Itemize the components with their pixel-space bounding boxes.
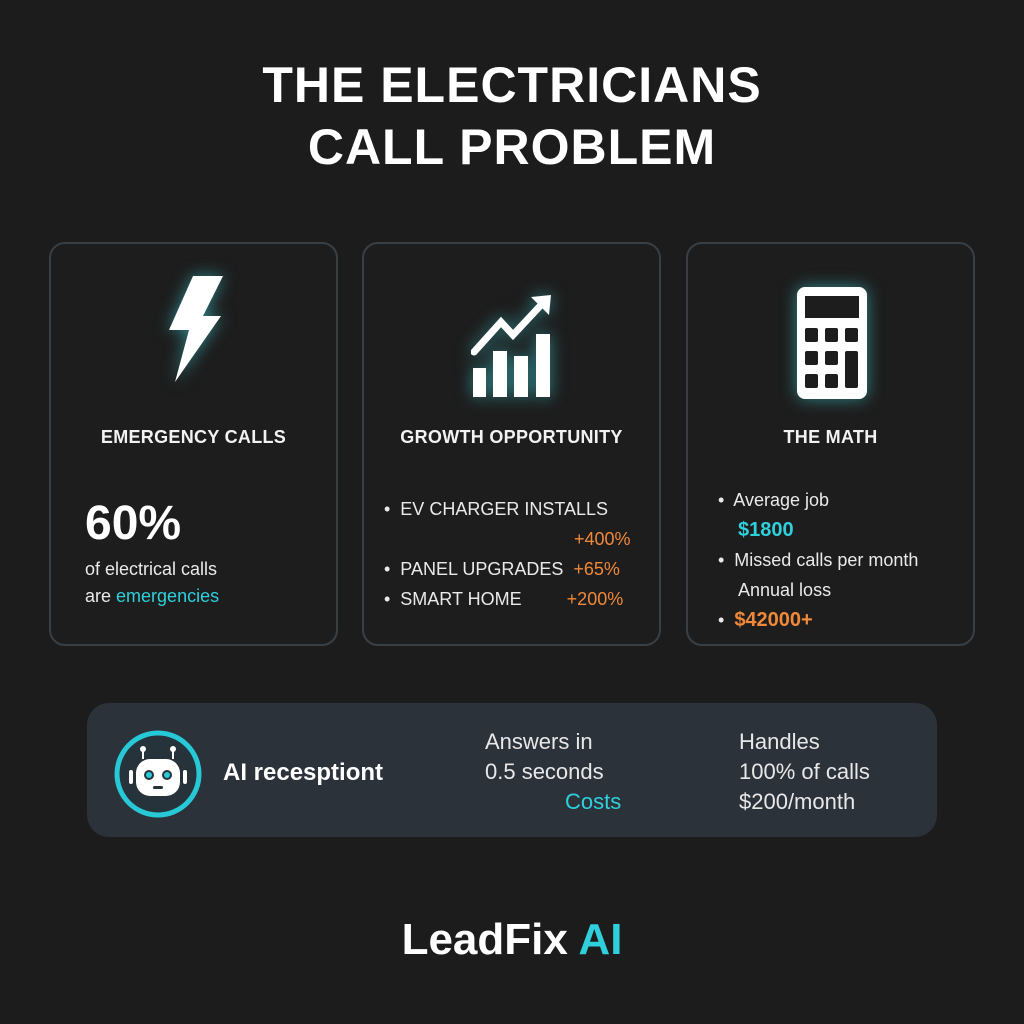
panel: growth opportunity: [362, 242, 661, 646]
list: • $42000+: [718, 609, 813, 631]
list: • SMART HOME +200%: [384, 589, 623, 609]
icon: calculator: [786, 276, 878, 410]
panel: AI receptionist bar: [87, 703, 937, 837]
title: [262, 57, 762, 175]
stat: answers: 0.5 seconds: [485, 759, 604, 784]
stat: handles: 100% of calls: [739, 759, 870, 784]
list: [384, 499, 631, 609]
description: [85, 559, 219, 606]
list: Annual loss: [738, 580, 831, 600]
stat: handles: [739, 729, 870, 814]
icon: lightning: [163, 266, 228, 382]
list: • EV CHARGER INSTALLS: [384, 499, 608, 519]
title: THE ELECTRICIANS: [262, 57, 762, 113]
heading: GROWTH OPPORTUNITY: [400, 427, 623, 447]
list: • PANEL UPGRADES +65%: [384, 559, 620, 579]
description: of electrical calls: [85, 559, 217, 579]
brand: LeadFix AI: [402, 915, 622, 964]
stat: 60%: [85, 497, 181, 550]
list: +400%: [574, 529, 631, 549]
list: $1800: [738, 519, 794, 541]
stat: answers: [485, 729, 621, 814]
heading: EMERGENCY CALLS: [101, 427, 286, 447]
label: AI recesptiont: [223, 759, 383, 786]
stat: answers: Costs: [565, 789, 621, 814]
panel: the math: [686, 242, 975, 646]
list: • Missed calls per month: [718, 550, 918, 570]
stat: handles: $200/month: [739, 789, 855, 814]
heading: THE MATH: [783, 427, 878, 447]
list: [718, 490, 918, 631]
icon: growth chart: [462, 286, 560, 406]
panel: emergency calls: [49, 242, 338, 646]
title: CALL PROBLEM: [308, 119, 716, 175]
icon: robot: [114, 730, 202, 818]
list: • Average job: [718, 490, 829, 510]
stat: answers: Answers in: [485, 729, 593, 754]
description: are emergencies: [85, 586, 219, 606]
stat: handles: Handles: [739, 729, 820, 754]
